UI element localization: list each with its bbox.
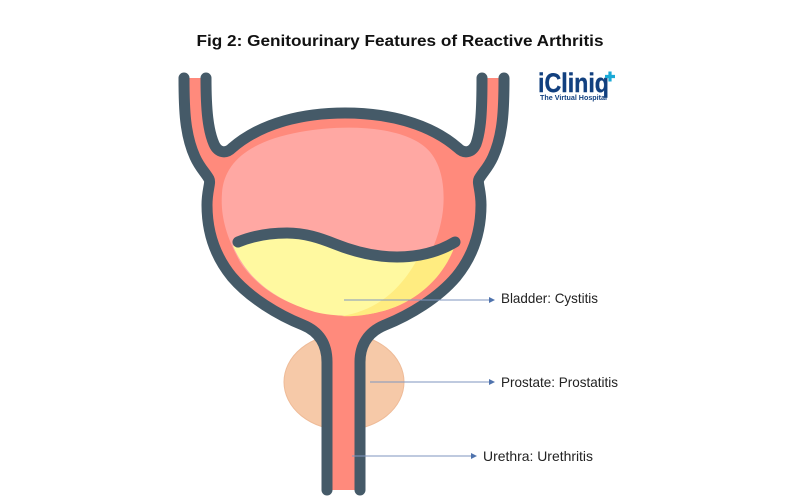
urine xyxy=(233,233,454,316)
arrow: urethra xyxy=(352,453,477,459)
top outline xyxy=(206,78,482,152)
title: Fig 2: Genitourinary Features of Reactive Arthritis xyxy=(196,33,604,50)
bladder wall fill xyxy=(183,78,504,490)
urine shade xyxy=(342,248,454,316)
label: bladder: Bladder: Cystitis xyxy=(501,290,598,306)
bladder inner highlight xyxy=(222,128,444,316)
prostate xyxy=(284,334,404,430)
urine surface line xyxy=(238,233,455,257)
logo: iCliniq: The Virtual Hospital xyxy=(540,95,607,102)
left outline xyxy=(184,78,327,490)
label: prostate: Prostate: Prostatitis xyxy=(501,374,618,390)
arrow: prostate xyxy=(370,379,495,385)
right outline xyxy=(360,78,504,490)
arrow: bladder xyxy=(344,297,495,303)
logo: iCliniq: iCliniq xyxy=(538,68,609,98)
label: urethra: Urethra: Urethritis xyxy=(483,448,593,464)
bladder illustration xyxy=(183,78,504,490)
logo plus xyxy=(605,72,615,82)
